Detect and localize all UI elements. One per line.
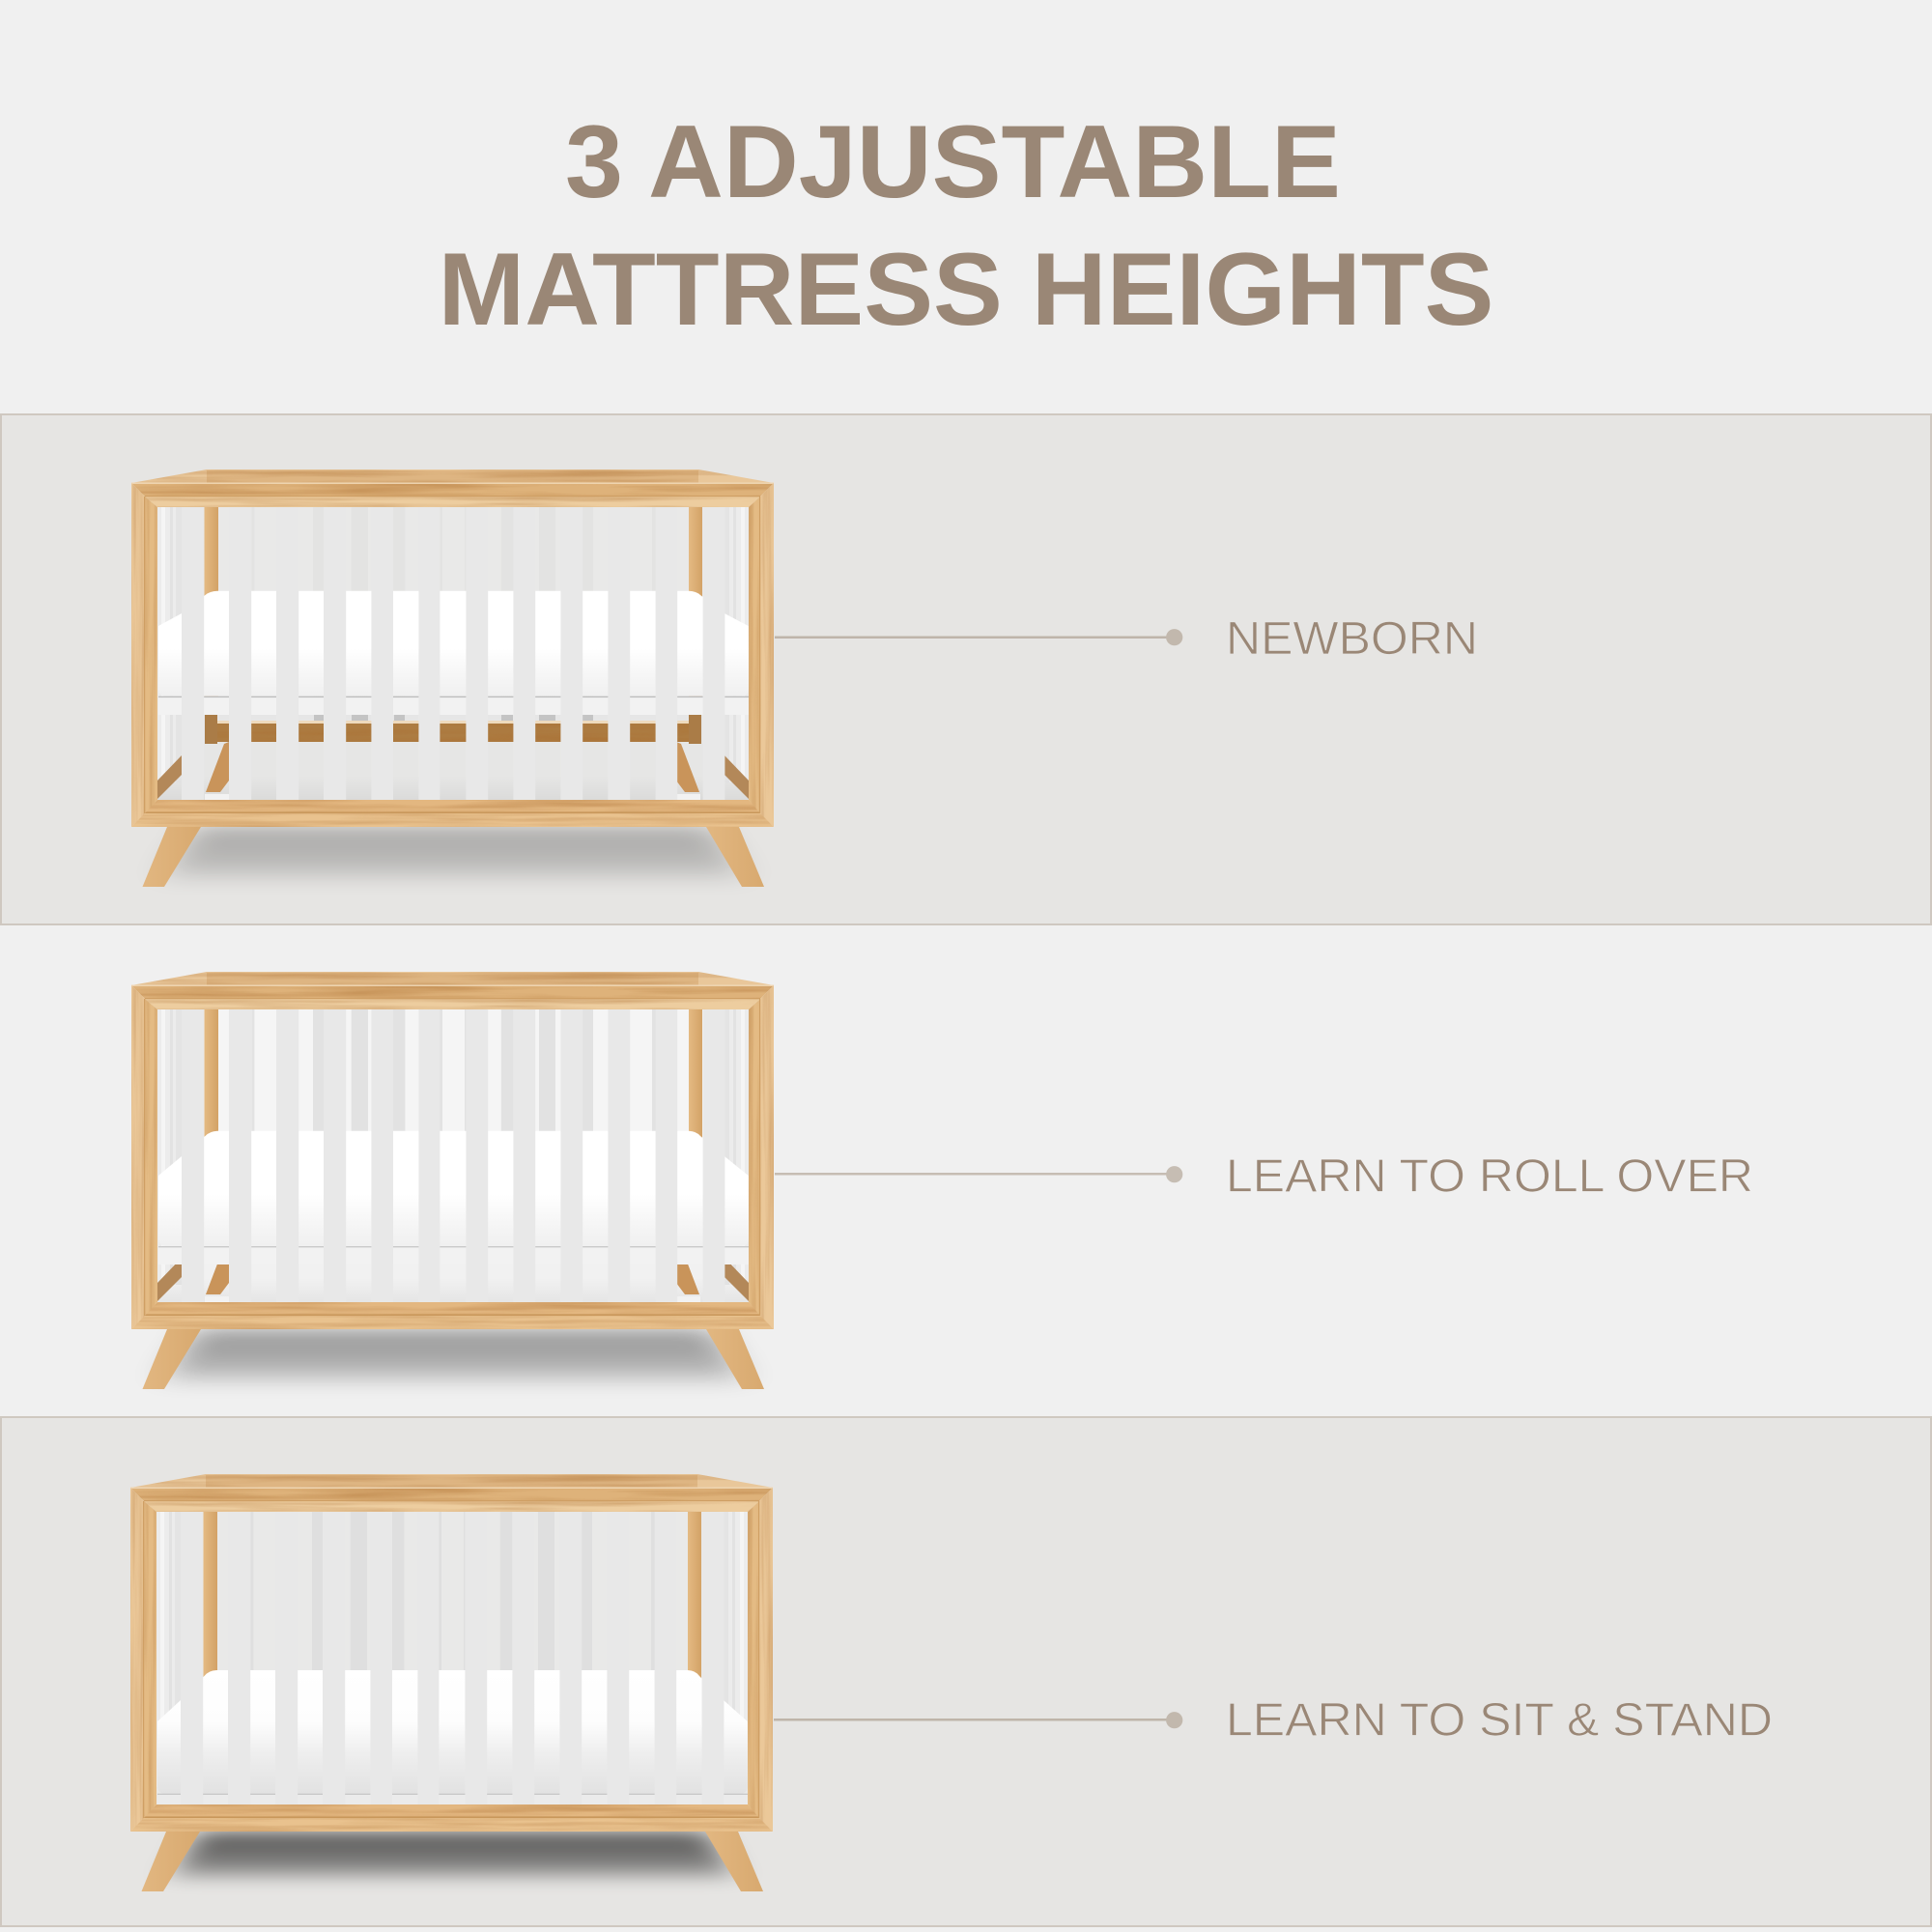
callout: learn to sit and stand [774, 1695, 1773, 1747]
crib: newborn height [131, 469, 774, 887]
title: 3 ADJUSTABLE [565, 104, 1341, 219]
mattress support bar [158, 1246, 749, 1264]
front slats [181, 1512, 724, 1806]
mattress [157, 1670, 748, 1794]
label: learn to roll over: LEARN TO ROLL OVER [1226, 1151, 1753, 1202]
title [439, 104, 1493, 347]
floor shadow [159, 1329, 749, 1383]
crib back panel [156, 1512, 748, 1804]
callout: newborn [775, 613, 1478, 665]
crib back panel [157, 507, 749, 800]
callout: learn to roll over [775, 1151, 1753, 1202]
mattress support bar [157, 1794, 748, 1804]
mattress [158, 1131, 749, 1246]
leader dot [1166, 1712, 1182, 1728]
front slats [182, 1009, 724, 1304]
crib: learn to roll over height [131, 972, 774, 1389]
wooden frame and legs [131, 972, 774, 1389]
label: learn to sit and stand: LEARN TO SIT & STAND [1226, 1695, 1773, 1747]
floor shadow [168, 1832, 738, 1880]
leader dot [1166, 629, 1182, 645]
crib: learn to sit and stand height [130, 1474, 773, 1891]
leader dot [1166, 1166, 1182, 1182]
mattress support bar [158, 696, 749, 715]
leader line [775, 636, 1171, 639]
front slats [182, 507, 724, 802]
wooden frame and legs [130, 1474, 773, 1891]
panel: newborn band [1, 414, 1931, 924]
label: newborn: NEWBORN [1226, 613, 1478, 665]
floor shadow [159, 827, 749, 881]
title: MATTRESS HEIGHTS [439, 232, 1493, 347]
mattress [158, 591, 749, 696]
panel: learn to sit and stand band [1, 1417, 1931, 1926]
wooden frame and legs [131, 469, 774, 887]
crib back panel [157, 1009, 749, 1302]
leader line [774, 1719, 1171, 1721]
leader line [775, 1173, 1171, 1175]
